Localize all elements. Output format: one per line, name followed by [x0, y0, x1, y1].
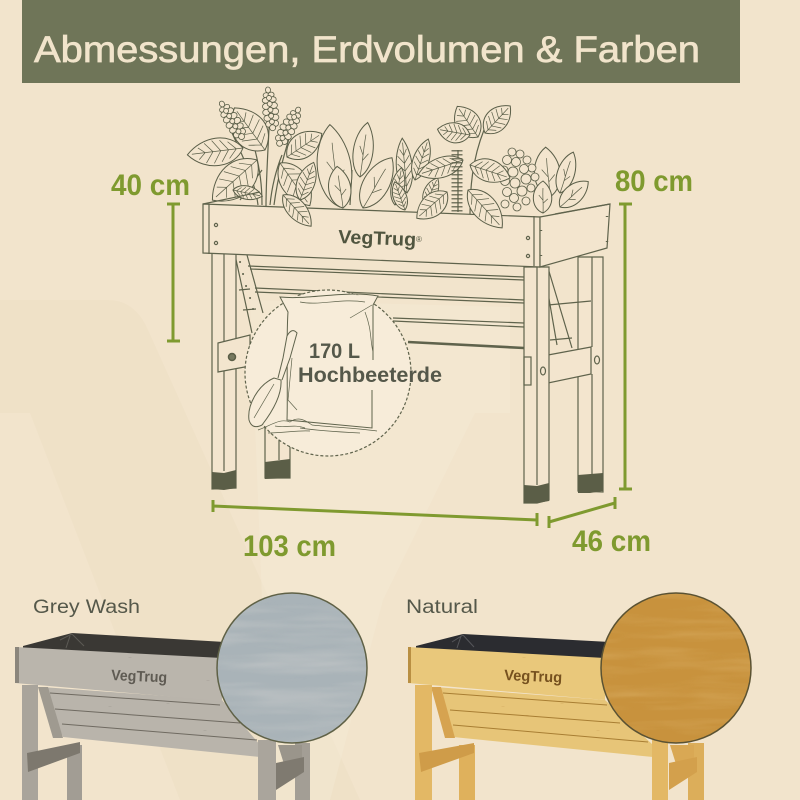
- bag: [280, 294, 378, 428]
- plants behind the box: [186, 86, 594, 215]
- label: Grey Wash: [33, 597, 140, 618]
- shovel: [249, 331, 297, 427]
- grey planter photo: [15, 633, 310, 800]
- box: ®: [416, 235, 422, 244]
- dimension: 103 cm: [213, 500, 537, 563]
- back legs: [578, 257, 603, 492]
- dimension: 40 cm: [111, 169, 190, 341]
- natural planter photo: [408, 634, 704, 800]
- dimension: 80 cm: 80 cm: [615, 165, 693, 198]
- title banner: [22, 0, 740, 83]
- seed spike dots: [452, 150, 462, 212]
- trough rails: [248, 266, 524, 327]
- label: Natural: [406, 597, 478, 618]
- front left leg: [212, 253, 236, 490]
- soil: [258, 419, 377, 433]
- dimension: 80 cm: [615, 165, 693, 489]
- left bracket and brace: [235, 255, 263, 333]
- grey planter photo: VegTrug: [111, 667, 168, 686]
- colour option: Natural: [406, 593, 751, 800]
- front right leg: [524, 267, 549, 503]
- right bracket and brace: [548, 268, 591, 348]
- leaves over the box: [276, 188, 318, 232]
- dimension: 40 cm: 40 cm: [111, 169, 190, 202]
- soil callout: Hochbeeterde: [298, 364, 442, 387]
- logo: VegTrug: [338, 227, 417, 251]
- dimension: 103 cm: 103 cm: [243, 530, 336, 563]
- dimension: 46 cm: [549, 497, 651, 558]
- planter line drawing: [186, 86, 610, 503]
- colour option: Grey Wash: [15, 593, 367, 800]
- flower spikes: [214, 86, 306, 150]
- grey wood swatch: [217, 593, 367, 743]
- 170 L text: 170 L: [309, 340, 360, 363]
- dimension: 46 cm: 46 cm: [572, 525, 651, 558]
- soil callout: [245, 290, 442, 456]
- box: [203, 192, 610, 267]
- natural wood swatch: [601, 593, 751, 743]
- natural planter photo: VegTrug: [504, 667, 563, 687]
- kale: [500, 148, 539, 211]
- title banner: Abmessungen, Erdvolumen & Farben: [34, 29, 700, 70]
